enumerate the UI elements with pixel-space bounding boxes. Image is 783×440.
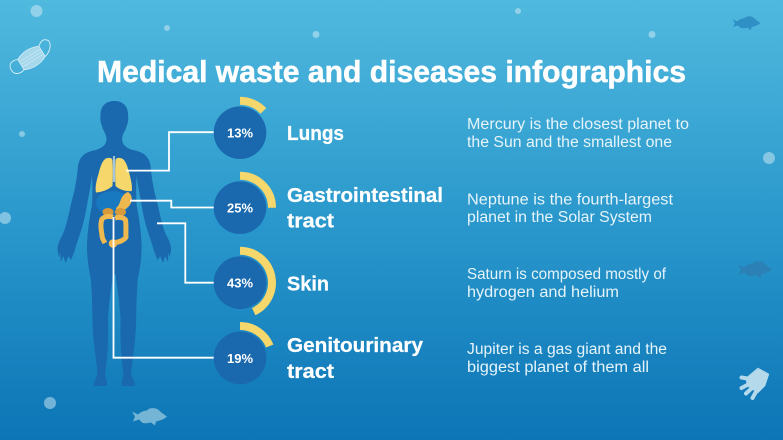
description: the Sun and the smallest one: [467, 134, 672, 151]
description: Mercury is the closest planet to: [467, 116, 689, 133]
connector: genitourinary: [114, 217, 214, 358]
connector: lungs: [126, 132, 214, 171]
description: planet in the Solar System: [467, 209, 652, 226]
description: biggest planet of them all: [467, 359, 649, 376]
donut gauge 13%: [214, 101, 266, 159]
donut gauge 19%: [214, 326, 270, 384]
organ: lungs: [96, 158, 132, 192]
connector: gastrointestinal: [130, 201, 214, 208]
donut gauge 43%: [214, 251, 272, 312]
description: Neptune is the fourth-largest: [467, 191, 674, 208]
organ: small intestine: [102, 208, 126, 216]
donut gauge 43%: 43%: [227, 276, 253, 290]
description: hydrogen and helium: [467, 284, 619, 301]
organ: stomach: [116, 192, 132, 212]
description: Jupiter is a gas giant and the: [467, 341, 667, 358]
donut gauge 13%: 13%: [227, 126, 253, 140]
label: Skin: [287, 274, 329, 296]
label: Gastrointestinal: [287, 185, 443, 207]
label: Lungs: [287, 123, 344, 145]
donut gauge 25%: 25%: [227, 200, 253, 216]
organ: colon: [101, 216, 126, 243]
label: tract: [287, 210, 334, 232]
connector: skin: [157, 223, 214, 283]
body silhouette: [58, 101, 171, 386]
donut gauge 25%: [214, 176, 272, 234]
trachea: [113, 156, 115, 182]
row: lungs: [214, 101, 689, 159]
human body: [58, 101, 171, 386]
donut gauge 19%: 19%: [227, 351, 253, 366]
row: genitourinary: [214, 326, 667, 384]
icon: fish middle right: [738, 261, 772, 278]
organ: liver region: [96, 191, 130, 215]
icon: glove: [742, 368, 769, 398]
row: gastrointestinal: [214, 176, 674, 234]
icon: fish top right: [732, 16, 760, 30]
icon: fish bottom left: [132, 408, 167, 426]
icon: face mask: [7, 38, 56, 78]
organ: rectum: [109, 239, 117, 248]
label: tract: [287, 361, 334, 383]
description: Saturn is composed mostly of: [467, 266, 667, 283]
title: Medical waste and diseases infographics: [97, 54, 686, 89]
label: Genitourinary: [287, 335, 424, 357]
row: skin: [214, 251, 667, 312]
